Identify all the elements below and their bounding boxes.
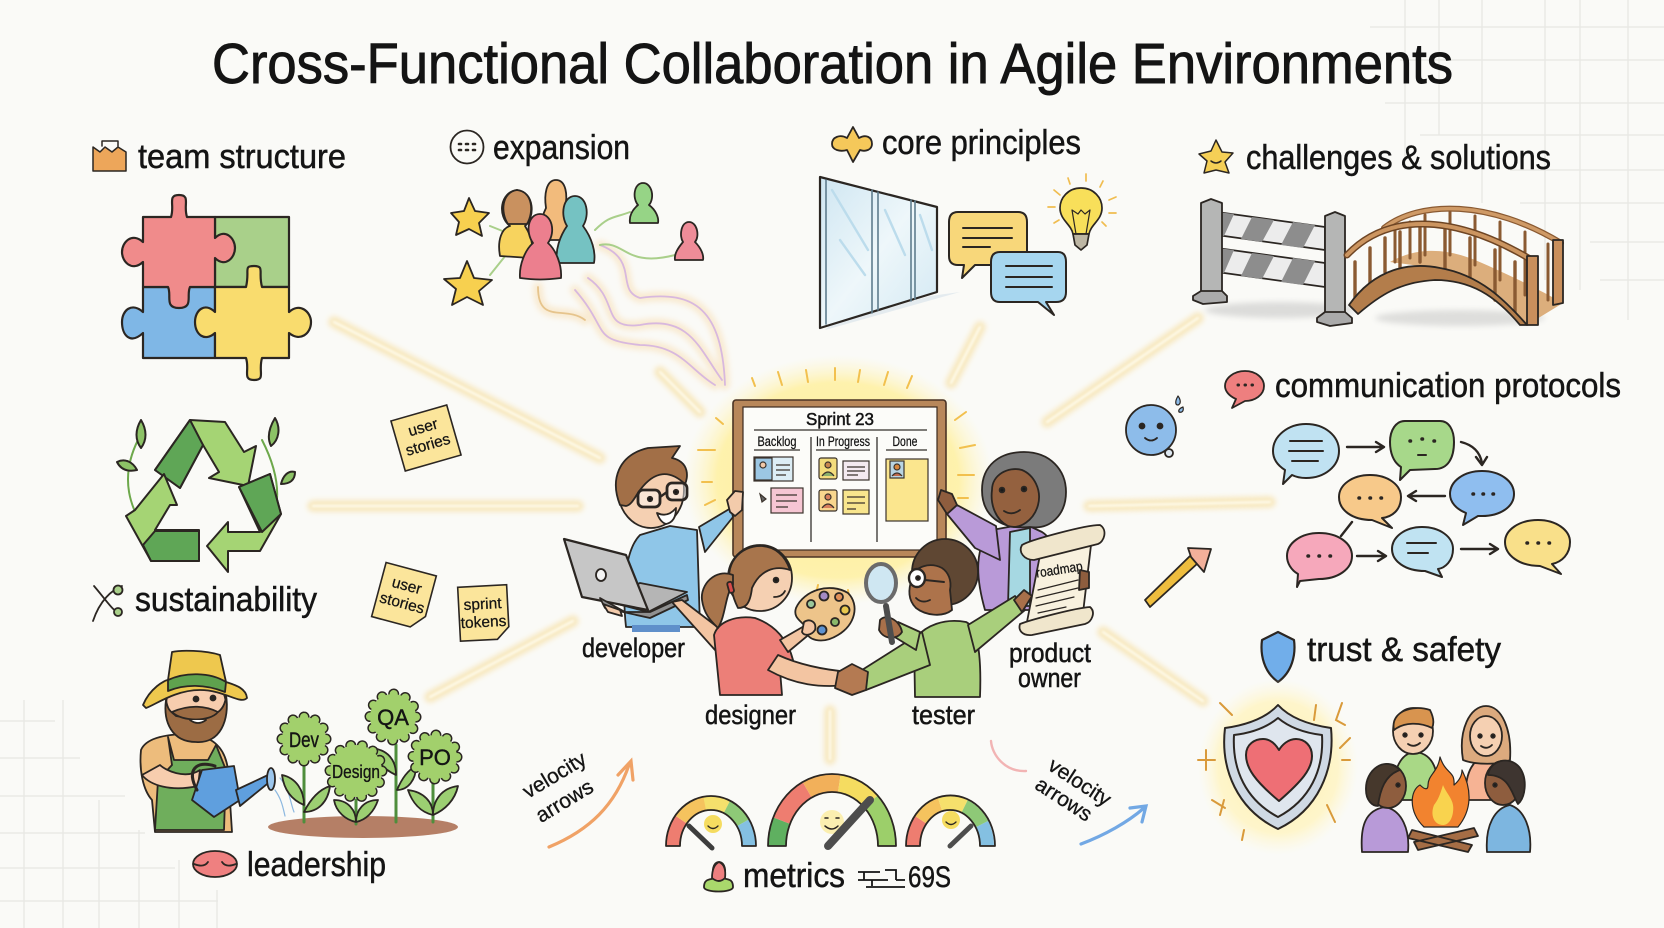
laptop [564,539,688,618]
recycle arrow: top [155,420,256,488]
person: green small [630,183,658,223]
board cards [754,457,928,521]
gardener with team plants [140,651,458,838]
icon: leaf loop [93,586,122,621]
kanban board [733,400,946,557]
central sprint scene [564,355,1104,697]
person: red front [520,214,561,280]
garbled scale mark [858,870,905,887]
radiating connector rays [313,318,1270,759]
plant: PO: PO [419,745,451,770]
board title: Sprint 23 [806,409,874,429]
label: product owner [1009,638,1091,693]
shield glow [1198,679,1358,855]
velocity arrow: left: arrows [532,775,598,828]
recycling symbol [117,418,295,572]
person: blonde woman [1462,706,1510,800]
wooden bridge [1347,209,1563,326]
roadmap scroll: roadmap [1035,558,1084,581]
character: product owner [938,452,1066,610]
sticky note: sprint tokens [458,585,509,641]
person: pink small [675,222,703,260]
heading: leadership: leadership [247,846,386,884]
bubble: green [1390,421,1454,480]
icon: metric figure [704,862,733,892]
icon: worried blue face [1126,396,1183,457]
watering can [192,764,294,817]
gauges [666,774,995,848]
sticky note: sprint tokens: tokens [460,613,507,632]
puzzle piece: blue [122,287,215,358]
communication flow [1273,421,1570,587]
character: developer [616,446,743,632]
recycle arrow: left [126,474,199,561]
heading: sustainability: sustainability [135,581,317,619]
icon: four-point star [832,127,872,162]
icon: light bulb [1048,174,1116,250]
campfire team [1362,706,1530,852]
star [444,261,492,305]
glowing heart shield [1198,679,1358,855]
bubble: yellow [949,212,1027,278]
character: designer [672,545,850,695]
icon: shield [1262,632,1294,682]
heading: trust & safety [1262,631,1501,682]
velocity arrow: left: velocity [519,747,591,803]
icon: factory [93,141,126,171]
icon: smiling star [1199,140,1233,173]
bubble: blue lines [1273,424,1339,484]
velocity arrow: right: velocity [1044,754,1116,812]
arrows between bubbles [1341,442,1498,561]
character: tester [862,539,1032,697]
wavy connector from expansion to board [538,245,725,385]
puzzle piece: yellow [195,266,311,380]
gauge: middle [768,774,896,846]
soil [268,816,458,838]
heading: metrics: metrics [743,857,845,895]
bubble: pink [1287,533,1352,587]
column headers: Backlog [758,434,796,449]
plant: QA [370,694,416,822]
star [451,198,489,236]
icon: pencil [1145,548,1211,607]
icon: red blob [193,851,237,877]
velocity arrow: right [991,741,1146,844]
sticky note: user stories [391,405,461,471]
sticky note: user stories: user [406,416,440,440]
sticky note: user stories (lower): stories [378,589,427,618]
sticky note: sprint tokens: sprint [463,595,503,614]
heading: expansion [450,129,630,167]
velocity arrow: left [519,747,633,847]
recycle arrow: right [207,474,281,572]
plant: Dev: Dev [289,729,319,752]
bubble: blue [991,252,1066,315]
heading: trust & safety: trust & safety [1307,631,1501,669]
plant: Design: Design [332,761,380,782]
glass wall [820,177,960,330]
plant: Dev [282,717,330,822]
heading: challenges & solutions: challenges & solutions [1246,139,1551,177]
magnifying glass [866,564,902,642]
label: developer: developer [582,633,685,663]
heart [1246,739,1312,801]
icon: dotted circle [450,130,484,164]
heading: team structure: team structure [138,138,346,176]
board glow [683,355,993,605]
velocity arrow: right: arrows [1031,773,1096,826]
sticky note: user stories: stories [404,431,453,460]
heading: metrics: 69S [908,861,951,894]
vines [128,440,277,530]
puzzle piece: green [215,217,289,287]
plant: Design [330,745,382,824]
kanban board: In Progress [816,434,870,449]
person: tan [541,180,571,240]
person: purple shirt [1362,764,1408,852]
person: blue shirt [1485,761,1530,852]
heading: communication protocols: communication protocols [1275,367,1621,405]
puzzle illustration [122,195,311,380]
campfire [1408,757,1478,852]
kanban board: Done [892,434,918,449]
barrier [1193,199,1355,326]
label: product owner: product [1009,638,1091,668]
person: yellow with brown hair [499,190,533,258]
sticky note: user stories (lower) [372,562,436,630]
handshake [835,664,868,695]
title: Cross-Functional Collaboration in Agile Environments [212,32,1453,96]
plant: PO [408,735,458,822]
core principles speech bubbles [949,212,1066,315]
label: designer: designer [705,700,796,730]
plant: QA: QA [377,705,409,730]
barrier post: right [1325,212,1345,313]
person: green shirt [1393,708,1438,800]
label: product owner: owner [1018,663,1081,693]
heading: metrics [704,857,951,895]
gardener [140,651,247,832]
shield [1224,705,1332,829]
sparks [1198,703,1350,840]
sticky note: user stories (lower): user [390,574,423,598]
gauge: right [906,795,995,846]
barrier board: lower [1217,248,1325,287]
heading: core principles: core principles [882,124,1081,162]
barrier post: left [1201,199,1222,293]
bubble: blue dots [1450,471,1514,525]
palette [795,588,855,640]
puzzle piece: red [122,195,235,308]
heading: leadership [193,846,386,884]
label: tester: tester [912,700,975,730]
bubble: orange [1339,475,1401,528]
gauge: left [666,796,756,848]
icon: red speech bubble [1225,371,1264,408]
expansion network illustration [444,180,703,305]
bubble: light blue [1392,527,1453,577]
roadmap scroll [1020,525,1104,635]
heading: expansion: expansion [493,129,630,167]
barrier board: upper [1217,212,1325,250]
person: teal [557,196,595,263]
bubble: yellow [1505,520,1570,574]
glow ticks [698,368,975,602]
